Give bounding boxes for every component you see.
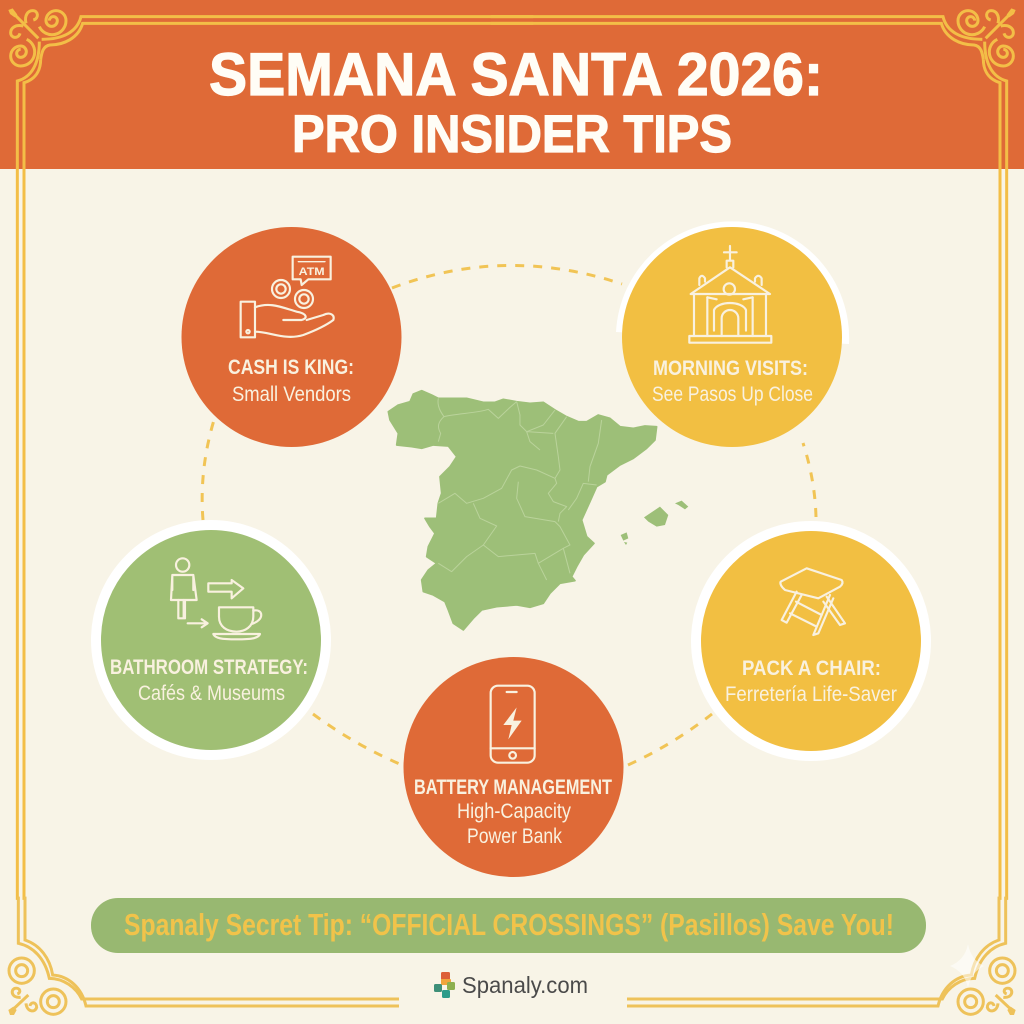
corner: top left — [8, 8, 533, 900]
header band — [0, 0, 1024, 169]
corner: bottom right — [624, 897, 1016, 1015]
title — [209, 41, 823, 164]
title: SEMANA SANTA 2026: — [209, 41, 823, 108]
label: battery management — [414, 776, 612, 848]
icon: smartphone with bolt — [491, 686, 535, 763]
label: battery management: High-Capacity — [457, 800, 571, 823]
panel: pack a chair — [696, 526, 926, 756]
label: battery management: Power Bank — [467, 825, 562, 848]
label: pack a chair — [725, 657, 897, 706]
label: morning visits — [652, 357, 813, 406]
dashed connector ring — [202, 265, 816, 765]
icon: folding chair — [780, 568, 845, 635]
icon: Spanaly logo — [434, 972, 455, 998]
label: pack a chair: Ferretería Life-Saver — [725, 683, 897, 706]
panel: bathroom strategy — [96, 525, 326, 755]
corner: bottom left — [8, 897, 400, 1015]
sparkle watermark — [950, 944, 984, 988]
secret tip banner — [91, 898, 926, 953]
corner: top right — [491, 8, 1016, 900]
label: battery management: BATTERY MANAGEMENT — [414, 776, 612, 799]
label: morning visits: MORNING VISITS: — [653, 357, 808, 380]
icon: hand with coins and ATM: ATM — [299, 266, 325, 278]
label: bathroom strategy: BATHROOM STRATEGY: — [110, 656, 308, 679]
panel: morning visits — [616, 221, 849, 447]
label: bathroom strategy: Cafés & Museums — [138, 682, 285, 705]
label: pack a chair: PACK A CHAIR: — [742, 657, 881, 680]
icon: church — [689, 246, 771, 343]
label: cash is king — [228, 356, 354, 406]
title: PRO INSIDER TIPS — [292, 105, 732, 164]
map of Spain — [388, 391, 688, 630]
label: cash is king: CASH IS KING: — [228, 356, 354, 379]
icon: person, arrows and coffee cup — [171, 558, 261, 639]
panel: cash is king — [182, 227, 402, 447]
icon: hand with coins and ATM — [241, 257, 334, 337]
panel: battery management — [404, 657, 624, 877]
brand name: Spanaly.com — [462, 972, 588, 998]
label: cash is king: Small Vendors — [232, 383, 351, 406]
label: bathroom strategy — [110, 656, 308, 705]
label: morning visits: See Pasos Up Close — [652, 383, 813, 406]
